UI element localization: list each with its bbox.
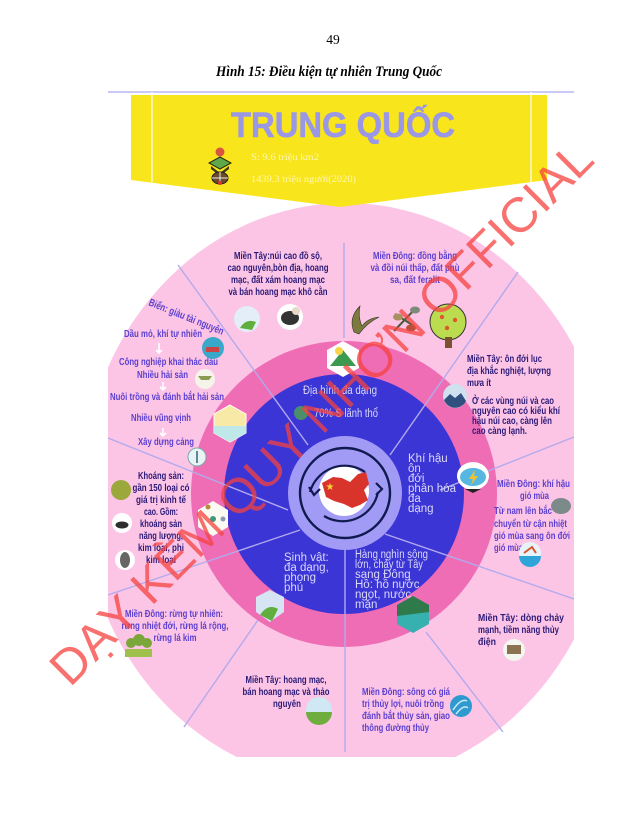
panel: climate west — [443, 353, 561, 437]
blue disc labels: climate — [408, 453, 457, 515]
panel: terrain east — [352, 249, 466, 348]
panel: climate west: mưa ít — [467, 377, 491, 389]
panel: sea: Nhiều hải sản — [137, 369, 188, 381]
panel: minerals: năng lượng, — [139, 530, 183, 542]
icon: map pin — [209, 148, 231, 176]
blue disc labels: rivers: lớn, chảy từ Tây — [355, 559, 423, 571]
blue disc labels: terrain: Địa hình đa dạng — [303, 385, 377, 397]
panel: sea: Dầu mỏ, khí tự nhiên — [124, 328, 202, 340]
blue disc labels: terrain — [294, 385, 378, 420]
blue disc labels: rivers: Hàng nghìn sông — [355, 549, 428, 561]
icon: China map — [322, 472, 369, 508]
center emblem: ★ — [326, 482, 335, 493]
panel: minerals: khoáng sản — [140, 518, 182, 530]
panel: rivers east — [362, 686, 472, 734]
panel: climate west: Miền Tây: ôn đới lục — [467, 353, 542, 365]
panel: sea — [110, 297, 226, 466]
center emblem — [288, 436, 402, 550]
panel: sea: Nuôi trồng và đánh bắt hải sản — [110, 390, 224, 403]
panel: terrain west: mạc, đất xám hoang mạc — [231, 274, 325, 286]
banner title: TRUNG QUỐC — [231, 105, 455, 145]
blue disc labels: biota — [284, 552, 329, 594]
panel: rivers west: mạnh, tiềm năng thủy — [478, 624, 559, 636]
blue disc labels: biota: đa dạng, — [284, 562, 329, 574]
panel: climate east: gió mùa — [494, 542, 523, 554]
panel: terrain east: Miền Đông: đồng bằng — [373, 249, 457, 262]
panel: rivers east: Miền Đông: sông có giá — [362, 686, 450, 698]
panel: terrain east: và đồi núi thấp, đất phù — [370, 262, 460, 274]
panel: desert: nguyên — [273, 698, 301, 710]
panel: forests: rừng lá kim — [154, 632, 196, 644]
panel: terrain west: cao nguyên,bòn địa, hoang — [228, 262, 328, 274]
panel: forests — [122, 608, 229, 657]
pink outer disc — [108, 204, 574, 757]
spokes — [108, 243, 574, 752]
panel: terrain west: Miền Tây:núi cao đồ sộ, — [234, 250, 322, 262]
panel: climate east — [494, 478, 571, 567]
panel: climate west: cao càng lạnh. — [472, 425, 527, 437]
watermark: DẠY KÈM QUY NHƠN OFFICIAL — [40, 132, 604, 696]
blue disc labels: terrain: 70% S lãnh thổ — [314, 408, 378, 420]
panel: desert: bán hoang mạc và thảo — [242, 686, 330, 698]
panel: climate east: Từ nam lên bắc — [494, 504, 552, 517]
panel: minerals: Khoáng sản: — [138, 470, 184, 482]
panel: minerals: giá trị kinh tế — [136, 494, 186, 506]
panel: climate west: hậu núi cao, càng lên — [472, 415, 552, 427]
blue disc labels: rivers: ngọt, nước — [355, 589, 411, 601]
panel: rivers east: thông đường thủy — [362, 722, 429, 734]
figure caption: Hình 15: Điều kiện tự nhiên Trung Quốc — [215, 64, 443, 80]
panel: minerals — [111, 470, 190, 570]
blue central disc — [224, 374, 464, 614]
blue disc labels: rivers: Hồ: hồ nước — [355, 579, 420, 591]
panel: rivers east: đánh bắt thủy sản, giao — [362, 709, 450, 722]
panel: desert — [242, 674, 332, 725]
blue disc labels: climate: ôn — [408, 463, 421, 475]
icon: bay hexagon — [214, 405, 246, 442]
blue disc labels: biota: Sinh vật: — [284, 552, 329, 564]
panel: rivers west: Miền Tây: dòng chảy — [478, 612, 564, 624]
blue disc labels: rivers: sang Đông — [355, 569, 411, 581]
panel: forests: rừng nhiệt đới, rừng lá rộng, — [122, 620, 229, 632]
icon: river hexagon — [397, 596, 429, 633]
icon: image hexagon — [256, 590, 284, 622]
panel: sea: Nhiều vũng vịnh — [131, 412, 191, 424]
blue disc labels: climate: Khí hậu — [408, 453, 448, 465]
page number: 49 — [326, 32, 340, 47]
panel: rivers east: trị thủy lợi, nuôi trồng — [362, 698, 444, 710]
panel: climate east: gió mùa — [520, 490, 549, 502]
panel: rivers west — [478, 612, 564, 661]
blue disc labels: climate: phân hóa — [408, 483, 457, 495]
panel: climate east: chuyển từ cận nhiệt — [494, 518, 567, 530]
blue disc labels: climate: đa — [408, 493, 421, 505]
blue disc labels: rivers: mặn — [355, 599, 377, 611]
blue disc labels: climate: đới — [408, 473, 424, 485]
blue disc labels: climate: dạng — [408, 503, 434, 515]
panel: desert: Miền Tây: hoang mạc, — [246, 674, 327, 686]
dark pink ring — [191, 341, 497, 647]
icon: minerals hexagon — [198, 501, 228, 536]
panel: climate east: gió mùa sang ôn đới — [494, 530, 570, 542]
panel: minerals: kim loại — [146, 554, 176, 566]
panel: minerals: gần 150 loại có — [132, 482, 190, 494]
panel: terrain east: sa, đất feralit — [390, 274, 440, 286]
blue disc labels: biota: phong — [284, 572, 316, 584]
area text: S: 9.6 triệu km2 — [251, 153, 319, 163]
population text: 1439.3 triệu người(2020) — [251, 174, 356, 185]
icon: terrain hexagon — [327, 341, 359, 377]
panel: forests: Miền Đông: rừng tự nhiên: — [125, 608, 223, 620]
panel: sea: Công nghiệp khai thác dầu — [119, 356, 218, 368]
panel: climate east: Miền Đông: khí hậu — [497, 478, 570, 490]
panel: minerals: cao. Gồm: — [144, 506, 178, 518]
panel: climate west: nguyên cao có kiểu khí — [472, 405, 561, 417]
panel: terrain west: và bán hoang mạc khô cằn — [228, 285, 328, 298]
panel: climate west: địa khắc nghiệt, lượng — [467, 364, 551, 377]
icon: globe with people — [212, 172, 228, 185]
panel: rivers west: điện — [478, 636, 496, 648]
panel: terrain west — [228, 250, 328, 332]
panel: climate west: Ở các vùng núi và cao — [472, 394, 554, 407]
panel: minerals: kim loại, phi — [138, 542, 184, 554]
blue disc labels: rivers — [355, 549, 428, 611]
panel: sea: Xây dựng cảng — [138, 436, 194, 448]
icon: storm cloud — [457, 462, 489, 493]
panel: sea: Biển: giàu tài nguyên — [147, 297, 226, 338]
blue disc labels: biota: phú — [284, 582, 303, 594]
header banner — [108, 92, 574, 207]
